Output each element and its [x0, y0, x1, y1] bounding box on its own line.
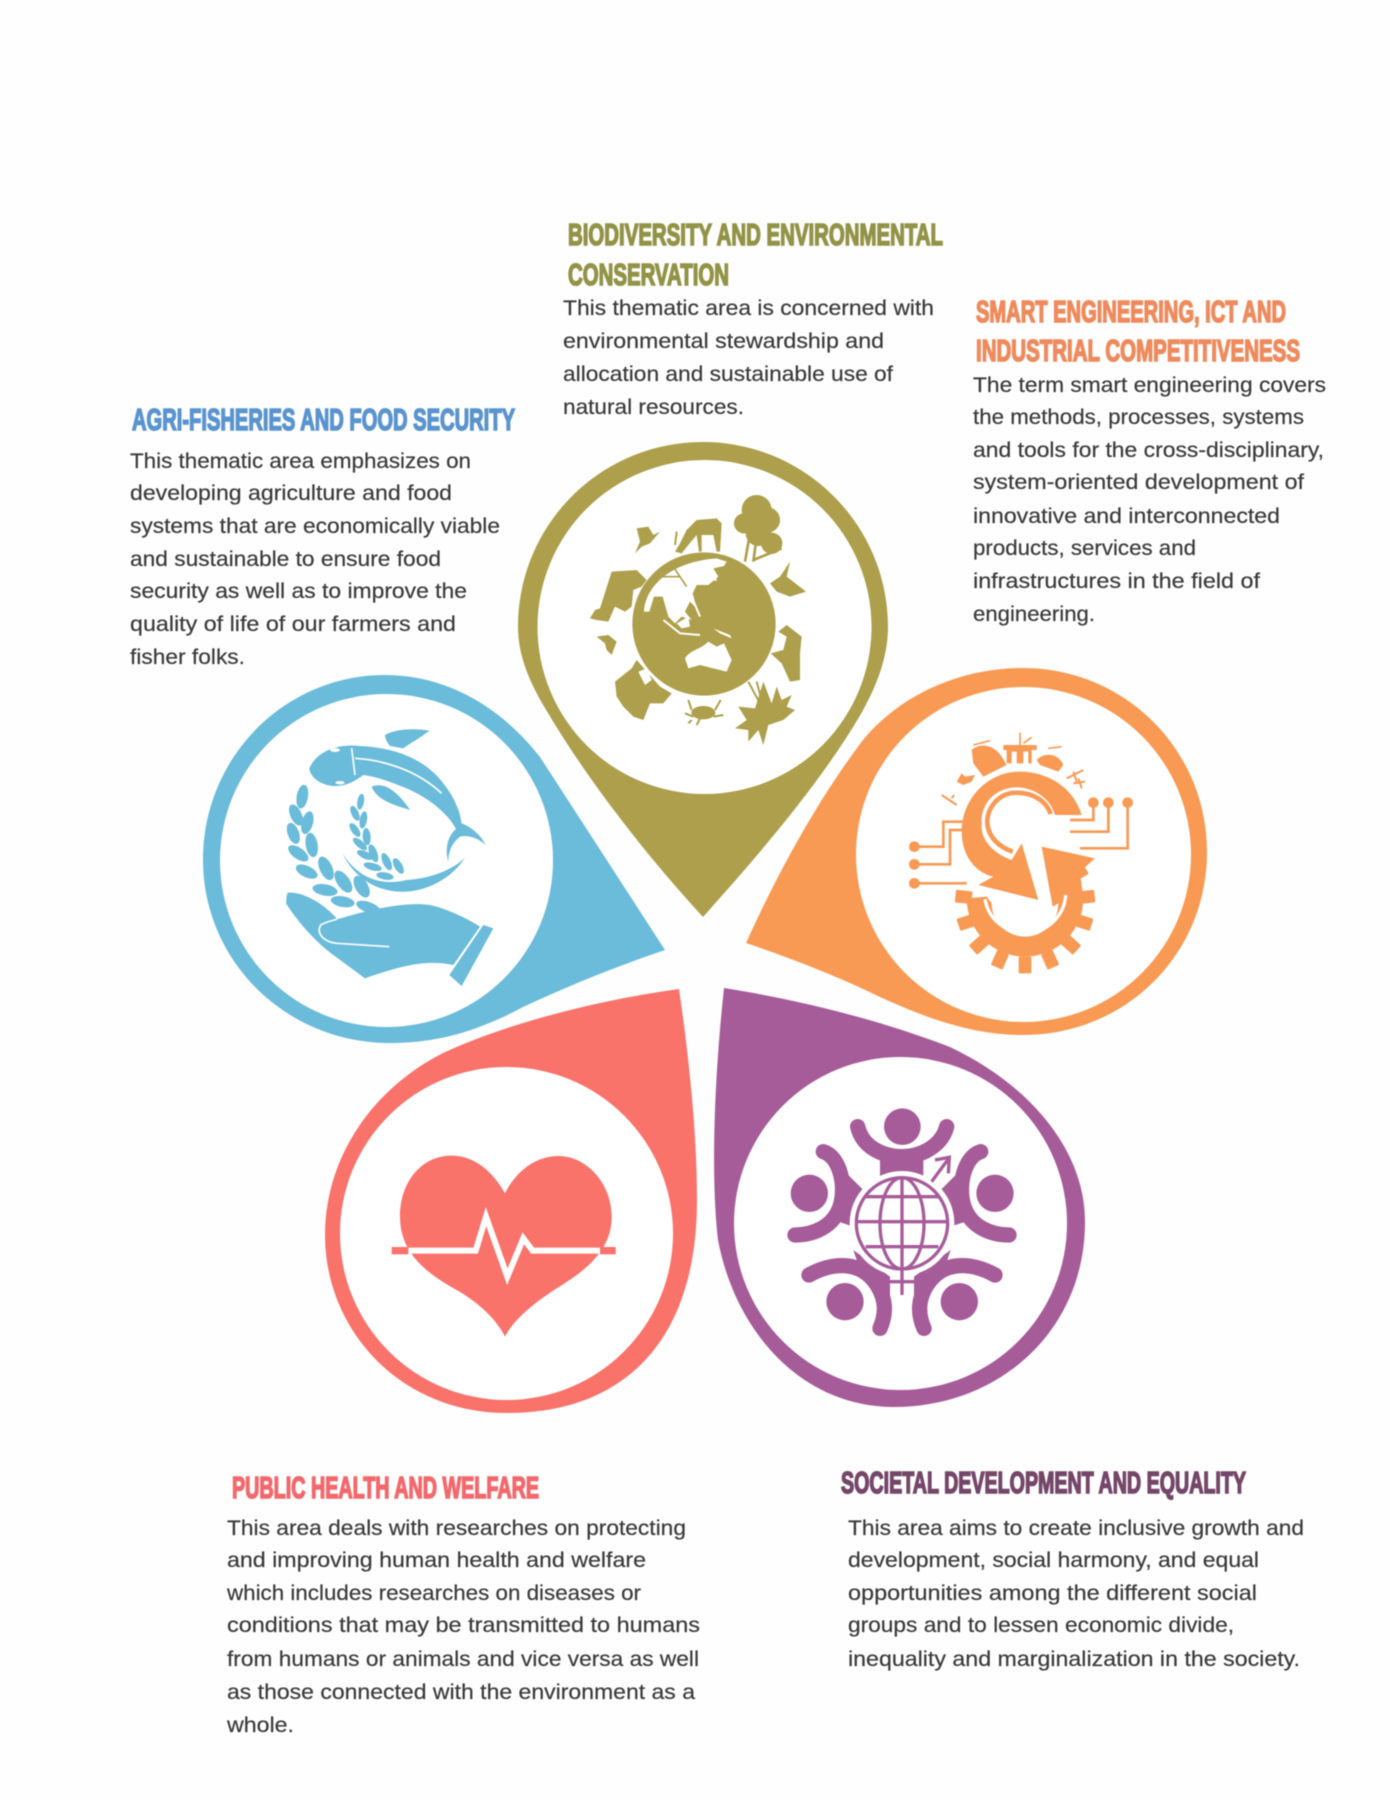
body text: public health: This area deals with researches on protecting	[227, 1517, 686, 1540]
text panel: biodiversity and environmental conservation	[563, 217, 943, 419]
text panel: agri-fisheries and food security	[130, 402, 515, 669]
body text: societal development: This area aims to create inclusive growth and	[848, 1517, 1304, 1540]
body text: societal development: groups and to lessen economic divide,	[848, 1614, 1234, 1637]
panel: red petal public health	[325, 989, 697, 1413]
heading: agri-fisheries: AGRI-FISHERIES AND FOOD SECURITY	[132, 402, 515, 437]
body text: smart engineering: and tools for the cross-disciplinary,	[973, 439, 1324, 462]
petal shape: purple	[714, 988, 1085, 1407]
panel: blue petal agri-fisheries	[203, 675, 665, 1043]
body text: agri-fisheries: systems that are economically viable	[130, 515, 500, 538]
body text: public health: from humans or animals and vice versa as well	[227, 1648, 699, 1671]
petal shape: blue	[203, 675, 665, 1043]
petal shape: red	[325, 989, 697, 1413]
body text: agri-fisheries: and sustainable to ensure food	[130, 548, 441, 571]
heading: public health: PUBLIC HEALTH AND WELFARE	[232, 1470, 539, 1505]
body text: smart engineering: system-oriented development of	[973, 471, 1304, 494]
panel: purple petal societal development	[714, 988, 1085, 1407]
body text: public health: conditions that may be transmitted to humans	[227, 1614, 700, 1637]
panel: olive petal biodiversity	[518, 442, 888, 917]
body text: agri-fisheries	[130, 450, 500, 669]
white circle: red petal	[340, 1067, 673, 1400]
body text: societal development: inequality and marginalization in the society.	[848, 1648, 1300, 1671]
petal shape: orange	[746, 668, 1207, 1035]
panel: orange petal smart engineering	[746, 668, 1207, 1035]
body text: public health: and improving human health and welfare	[227, 1549, 646, 1572]
body text: public health: as those connected with the environment as a	[227, 1681, 695, 1704]
icon: smart S with gear, circuit and city	[909, 733, 1133, 973]
icon: heart with pulse line	[392, 1156, 616, 1337]
heading: biodiversity	[568, 217, 943, 292]
body text: smart engineering: engineering.	[973, 603, 1095, 626]
white circle: olive petal	[538, 460, 872, 794]
body text: societal development	[848, 1517, 1304, 1671]
icon: people around globe with gender symbols	[791, 1108, 1014, 1328]
body text: agri-fisheries: quality of life of our farmers and	[130, 613, 456, 636]
body text: smart engineering: products, services and	[973, 537, 1196, 560]
heading: biodiversity: CONSERVATION	[568, 257, 729, 292]
icon: fish, wheat and hand	[284, 729, 493, 986]
white circle: purple petal	[734, 1057, 1067, 1390]
body text: smart engineering: innovative and interconnected	[973, 505, 1280, 528]
body text: societal development: development, social harmony, and equal	[848, 1549, 1259, 1572]
body text: agri-fisheries: developing agriculture and food	[130, 482, 452, 505]
body text: agri-fisheries: fisher folks.	[130, 646, 245, 669]
body text: public health	[226, 1517, 700, 1737]
body text: public health: which includes researches on diseases or	[226, 1582, 641, 1605]
white circle: orange petal	[856, 687, 1191, 1022]
text panel: smart engineering	[973, 294, 1326, 626]
body text: societal development: opportunities among the different social	[848, 1582, 1257, 1605]
body text: agri-fisheries: This thematic area emphasizes on	[130, 450, 471, 473]
text panel: public health and welfare	[226, 1470, 700, 1737]
body text: biodiversity: allocation and sustainable use of	[563, 363, 893, 386]
heading: biodiversity: BIODIVERSITY AND ENVIRONMENTAL	[568, 217, 943, 252]
body text: agri-fisheries: security as well as to improve the	[130, 580, 467, 603]
icon: globe with animals and plants	[590, 495, 806, 745]
text panel: societal development and equality	[841, 1465, 1304, 1671]
body text: biodiversity: natural resources.	[563, 396, 744, 419]
petal shape: olive	[518, 442, 888, 917]
body text: smart engineering: the methods, processes, systems	[973, 406, 1304, 429]
body text: public health: whole.	[226, 1714, 294, 1737]
heading: smart engineering	[976, 294, 1300, 368]
white circle: blue petal	[220, 694, 553, 1027]
body text: biodiversity: This thematic area is concerned with	[563, 297, 934, 320]
body text: smart engineering	[973, 374, 1326, 626]
body text: biodiversity	[563, 297, 934, 419]
body text: smart engineering: The term smart engineering covers	[973, 374, 1326, 397]
body text: smart engineering: infrastructures in the field of	[973, 570, 1260, 593]
body text: biodiversity: environmental stewardship and	[563, 330, 884, 353]
